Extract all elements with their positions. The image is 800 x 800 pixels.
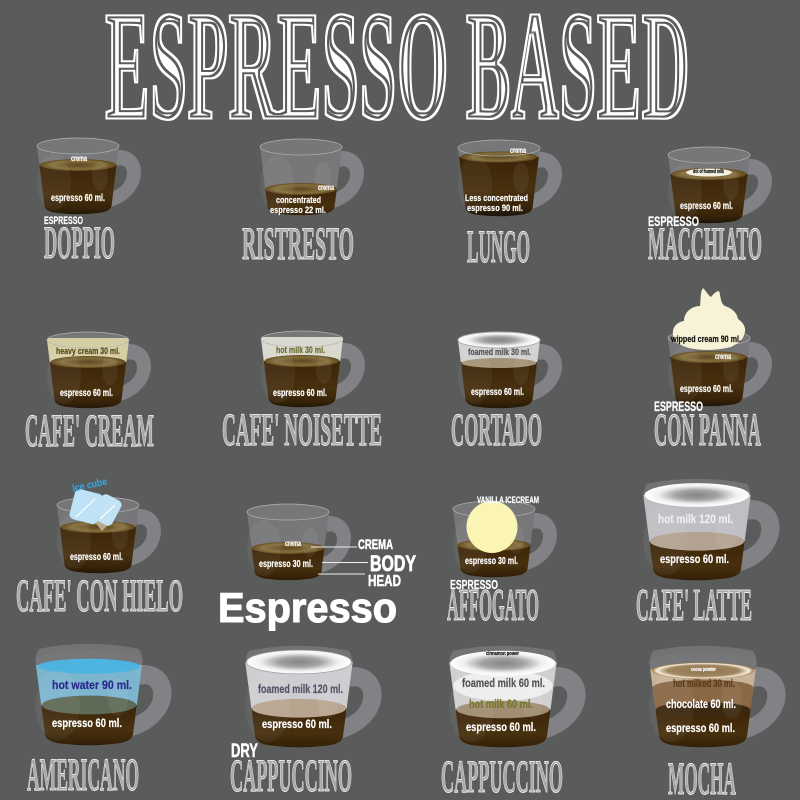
cup: con panna: wipped cream 90 ml. — [670, 334, 741, 345]
text: AMERICANO — [27, 749, 139, 800]
cup: mocha: hot milked 30 ml. — [673, 678, 735, 690]
cup: cafe cream — [25, 332, 154, 457]
cup: doppio — [36, 138, 141, 259]
cup: doppio: DOPPIO — [44, 217, 115, 269]
cup: cafe latte: espresso 60 ml. — [660, 552, 729, 566]
cup: lungo: LUNGO — [467, 221, 530, 273]
cup: doppio: espresso 60 ml. — [51, 193, 105, 204]
cup: cafe con hielo — [16, 476, 183, 622]
cup: lungo: crema — [510, 146, 526, 155]
cup: americano — [27, 644, 172, 800]
cup: dry cappuccino: DRY — [231, 741, 258, 762]
cup: cafe con hielo: Ice cube — [72, 476, 108, 495]
cup: lungo: espresso 90 ml. — [467, 203, 523, 214]
cup: macchiato: ESPRESSO — [648, 213, 699, 229]
cup: americano: espresso 60 ml. — [52, 716, 122, 730]
cup: espresso diagram: CREMA — [358, 536, 393, 552]
cup: ristresto: concentrated — [276, 195, 321, 206]
cup: mocha: espresso 60 ml. — [666, 721, 735, 735]
cup: macchiato: dot of foamed milk — [693, 169, 724, 175]
cup: mocha: chocolate 60 ml. — [666, 697, 736, 711]
text: CAFE' CON HIELO — [16, 570, 183, 622]
cup: cappuccino: foamed milk 60 ml. — [462, 676, 545, 690]
cup: espresso diagram — [218, 504, 416, 631]
cup: affogato: espresso 30 ml. — [465, 556, 518, 567]
cup: cafe noisette: espresso 60 ml. — [273, 388, 327, 399]
icon: ice cubes — [69, 488, 123, 531]
cup: ristresto — [242, 139, 364, 270]
cup: espresso diagram: espresso 30 ml. — [259, 559, 313, 570]
cup: affogato — [447, 495, 557, 630]
cup: cafe noisette — [222, 331, 382, 456]
cup: cortado: espresso 60 ml. — [471, 387, 524, 398]
cup: cortado — [451, 332, 562, 456]
text: AFFOGATO — [447, 580, 539, 630]
cup: mocha: cocoa powder — [691, 667, 716, 673]
cup: doppio: ESPRESSO — [44, 215, 83, 227]
text: CAFE' NOISETTE — [222, 404, 382, 456]
cup: espresso diagram: crema — [285, 539, 301, 548]
cup: con panna — [654, 288, 772, 456]
cup: macchiato — [648, 147, 772, 270]
cup: lungo: Less concentrated — [465, 193, 528, 204]
cup: doppio: crema — [71, 154, 87, 163]
cup: cafe con hielo: espresso 60 ml. — [70, 552, 123, 563]
cup: mocha — [644, 646, 786, 800]
cup: cappuccino: cinnamon power — [486, 651, 519, 657]
cup: cortado: foamed milk 30 ml. — [468, 347, 531, 358]
cup: affogato: VANILLA ICECREAM — [477, 495, 539, 505]
cup: americano: hot water 90 ml. — [52, 678, 132, 692]
cup: con panna: ESPRESSO — [654, 398, 703, 414]
cup: lungo — [458, 140, 562, 263]
cup: cafe latte — [636, 479, 780, 630]
cup: ristresto: crema — [318, 183, 334, 192]
text: CORTADO — [451, 404, 542, 456]
icon: ice cream ball — [466, 501, 518, 553]
cup: ristresto: espresso 22 ml. — [270, 205, 326, 216]
cup: dry cappuccino: foamed milk 120 ml. — [258, 682, 343, 696]
cup: macchiato: espresso 60 ml. — [680, 201, 733, 212]
cup: cafe cream: espresso 60 ml. — [60, 388, 113, 399]
cup: espresso diagram: HEAD — [368, 573, 401, 590]
cup: espresso diagram: BODY — [370, 551, 416, 576]
cup: cappuccino: espresso 60 ml. — [466, 720, 536, 734]
cup: con panna: crema — [715, 352, 731, 361]
text: CAFE' CREAM — [25, 405, 154, 457]
cup: dry cappuccino: espresso 60 ml. — [262, 717, 332, 731]
cup: cappuccino: hot milk 60 ml. — [469, 697, 533, 711]
cup: cafe cream: heavy cream 30 ml. — [56, 346, 120, 357]
icon: whipped cream — [673, 288, 745, 350]
cup: affogato: ESPRESSO — [450, 577, 498, 592]
cup: espresso diagram: Espresso — [218, 584, 397, 631]
text: RISTRESTO — [242, 218, 354, 270]
cup: cafe latte: hot milk 120 ml. — [658, 512, 733, 526]
cup: dry cappuccino — [230, 646, 382, 800]
cup: cappuccino — [441, 646, 586, 800]
cup: con panna: espresso 60 ml. — [680, 384, 733, 395]
cup: cafe noisette: hot milk 30 ml. — [276, 345, 325, 356]
